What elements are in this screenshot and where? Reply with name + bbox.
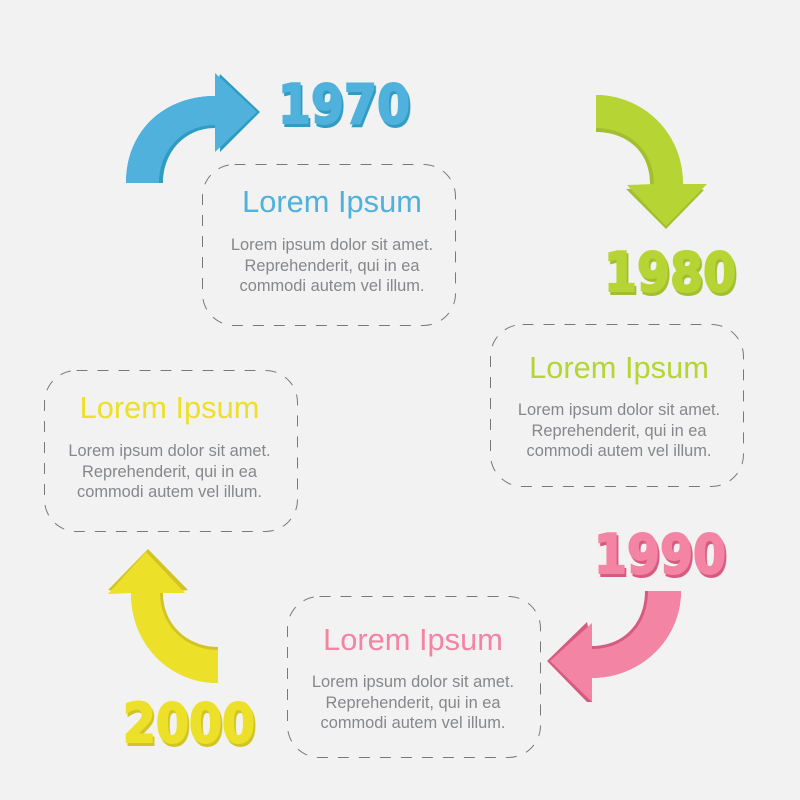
- text block: Reprehenderit, qui in ea: [82, 463, 257, 481]
- dashed border: [287, 596, 541, 758]
- year: 2000: 2000: [123, 692, 255, 755]
- text block: [68, 442, 271, 501]
- text block: commodi autem vel illum.: [321, 714, 505, 732]
- year: 1970: 1970: [278, 73, 410, 136]
- year: 1990: 1990: [594, 523, 726, 586]
- text block: [518, 401, 720, 460]
- heading: Lorem Ipsum: [323, 622, 503, 657]
- text block: Reprehenderit, qui in ea: [532, 422, 706, 440]
- panel: 1980: [490, 324, 744, 487]
- panel: 1970: [202, 164, 456, 326]
- heading: Lorem Ipsum: [80, 390, 259, 425]
- text block: commodi autem vel illum.: [77, 483, 262, 501]
- text block: commodi autem vel illum.: [527, 442, 711, 460]
- panel: 2000: [44, 370, 298, 532]
- text block: Reprehenderit, qui in ea: [245, 257, 419, 275]
- heading: Lorem Ipsum: [242, 184, 422, 219]
- text block: [231, 236, 433, 295]
- text block: commodi autem vel illum.: [240, 277, 424, 295]
- heading: Lorem Ipsum: [529, 350, 709, 385]
- text block: Lorem ipsum dolor sit amet.: [312, 673, 514, 691]
- text block: Reprehenderit, qui in ea: [326, 694, 500, 712]
- text block: Lorem ipsum dolor sit amet.: [68, 442, 271, 460]
- year: 1980: 1980: [604, 241, 736, 304]
- text block: Lorem ipsum dolor sit amet.: [231, 236, 433, 254]
- text block: Lorem ipsum dolor sit amet.: [518, 401, 720, 419]
- dashed border: [202, 164, 456, 326]
- text block: [312, 673, 514, 732]
- panel: 1990: [287, 596, 541, 758]
- dashed border: [490, 324, 744, 487]
- dashed border: [44, 370, 298, 532]
